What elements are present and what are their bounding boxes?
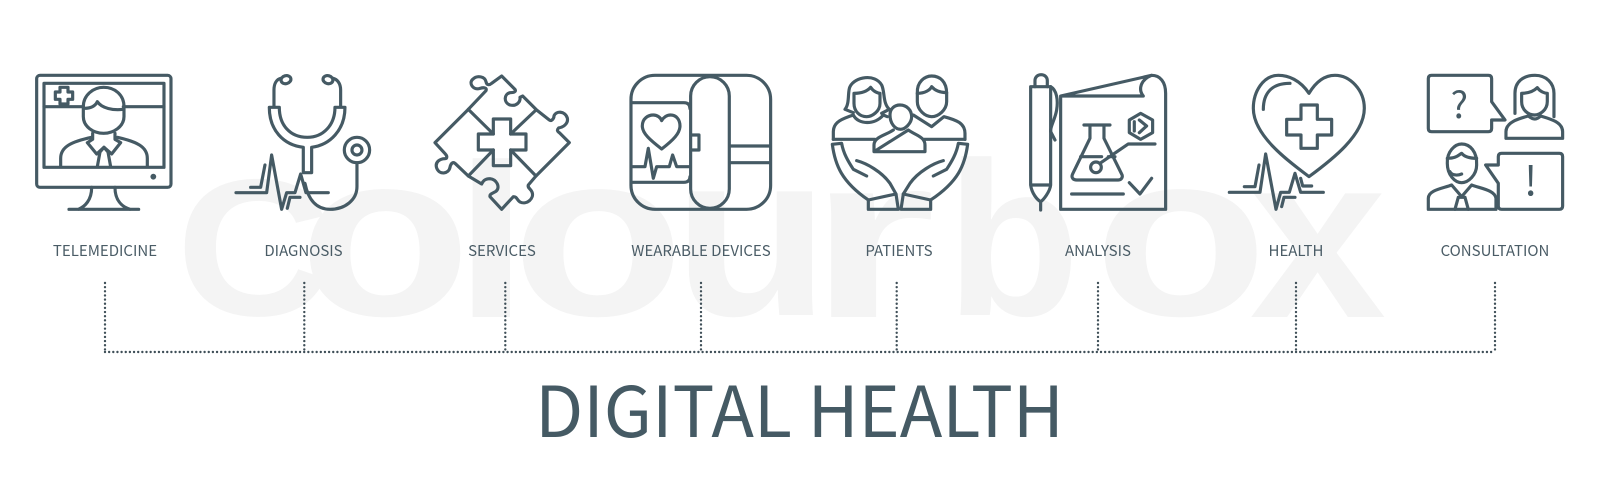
watermark: o: [1094, 103, 1268, 365]
watermark: x: [1250, 105, 1386, 367]
label: diagnosis: DIAGNOSIS: [264, 240, 343, 261]
label: telemedicine: TELEMEDICINE: [53, 240, 157, 261]
icon: consultation: ?: [1451, 75, 1468, 129]
label: wearable devices: WEARABLE DEVICES: [631, 240, 771, 261]
icon: analysis document and pen: [1031, 75, 1166, 210]
dotted connector: [105, 283, 1495, 352]
icon: heart with cross: [1229, 75, 1364, 209]
watermark: o: [299, 103, 471, 365]
title: DIGITAL HEALTH: [535, 357, 1064, 458]
icon: stethoscope: [236, 75, 370, 209]
watermark: l: [454, 120, 529, 364]
label: patients: PATIENTS: [865, 240, 933, 261]
icon: consultation: !: [1524, 148, 1537, 207]
icon: wearable device: [631, 75, 771, 209]
watermark: b: [946, 118, 1080, 362]
label: analysis: ANALYSIS: [1065, 240, 1131, 261]
watermark: o: [512, 103, 684, 365]
icon: telemedicine monitor: [37, 75, 171, 209]
watermark: [176, 103, 1386, 367]
watermark: r: [808, 105, 936, 367]
watermark: C: [176, 139, 331, 357]
icon: patients in hands: [832, 76, 968, 209]
label: services: SERVICES: [468, 240, 536, 261]
label: health: HEALTH: [1269, 240, 1323, 261]
icon: puzzle with cross: [435, 76, 569, 209]
label: consultation: CONSULTATION: [1441, 240, 1549, 261]
icon: consultation: [1428, 75, 1563, 209]
watermark: u: [673, 103, 830, 365]
